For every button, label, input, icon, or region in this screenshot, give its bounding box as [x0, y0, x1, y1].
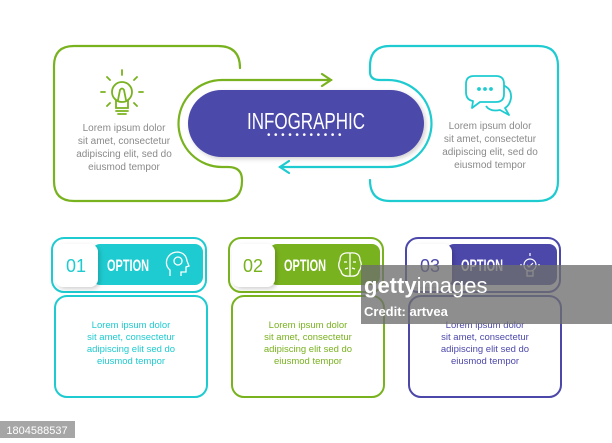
- panel: option 01: OPTION: [107, 256, 149, 275]
- watermark: [361, 265, 612, 324]
- panel: option 02: [229, 238, 384, 397]
- panel: top left green frame with arrow: [54, 46, 331, 201]
- panel: option 03: Lorem ipsum dolor: [446, 320, 524, 331]
- panel: option 03: [406, 238, 561, 397]
- panel: option 02: OPTION: [284, 256, 326, 275]
- id label: 1804588537: [6, 425, 68, 437]
- text: top left: [76, 123, 172, 173]
- panel: option 01: sit amet, consectetur: [87, 332, 175, 343]
- panel: option 01: 01: [66, 256, 86, 276]
- text: top left: sit amet, consectetur: [78, 136, 171, 147]
- watermark: Credit: artvea: [364, 304, 449, 319]
- panel: option 02: sit amet, consectetur: [264, 332, 352, 343]
- icon: light bulb: [101, 70, 143, 114]
- text: top left: adipiscing elit, sed do: [76, 149, 172, 160]
- panel: option 01: Lorem ipsum dolor: [92, 320, 170, 331]
- arrow: right: [322, 74, 331, 86]
- icon: chat bubbles: [466, 76, 511, 115]
- title pill: •••••••••••: [267, 130, 345, 141]
- panel: option 01: eiusmod tempor: [97, 356, 165, 367]
- title pill: INFOGRAPHIC: [247, 108, 365, 134]
- panel: option 03: eiusmod tempor: [451, 356, 519, 367]
- panel: option 03: OPTION: [461, 256, 503, 275]
- arrow: left: [280, 161, 289, 173]
- panel: option 03: adipiscing elit sed do: [441, 344, 529, 355]
- watermark: gettyimages: [364, 273, 487, 298]
- text: top right: sit amet, consectetur: [444, 134, 537, 145]
- panel: option 01: [52, 238, 207, 397]
- panel: option 02: Lorem ipsum dolor: [269, 320, 347, 331]
- text: top right: [442, 121, 538, 171]
- panel: option 01: adipiscing elit sed do: [87, 344, 175, 355]
- panel: option 02: 02: [243, 256, 263, 276]
- text: top right: eiusmod tempor: [454, 160, 527, 171]
- panel: option 02: adipiscing elit sed do: [264, 344, 352, 355]
- panel: option 03: sit amet, consectetur: [441, 332, 529, 343]
- panel: option 02: eiusmod tempor: [274, 356, 342, 367]
- title pill: [188, 90, 424, 157]
- id label: [0, 421, 75, 438]
- text: top right: Lorem ipsum dolor: [449, 121, 532, 132]
- panel: option 03: 03: [420, 256, 440, 276]
- icon: brain: [339, 253, 361, 276]
- icon: bulb check: [520, 253, 540, 276]
- panel: top right cyan frame with arrow: [280, 46, 558, 201]
- icon: head gear: [166, 252, 189, 276]
- text: top left: Lorem ipsum dolor: [83, 123, 166, 134]
- text: top right: adipiscing elit, sed do: [442, 147, 538, 158]
- text: top left: eiusmod tempor: [88, 162, 161, 173]
